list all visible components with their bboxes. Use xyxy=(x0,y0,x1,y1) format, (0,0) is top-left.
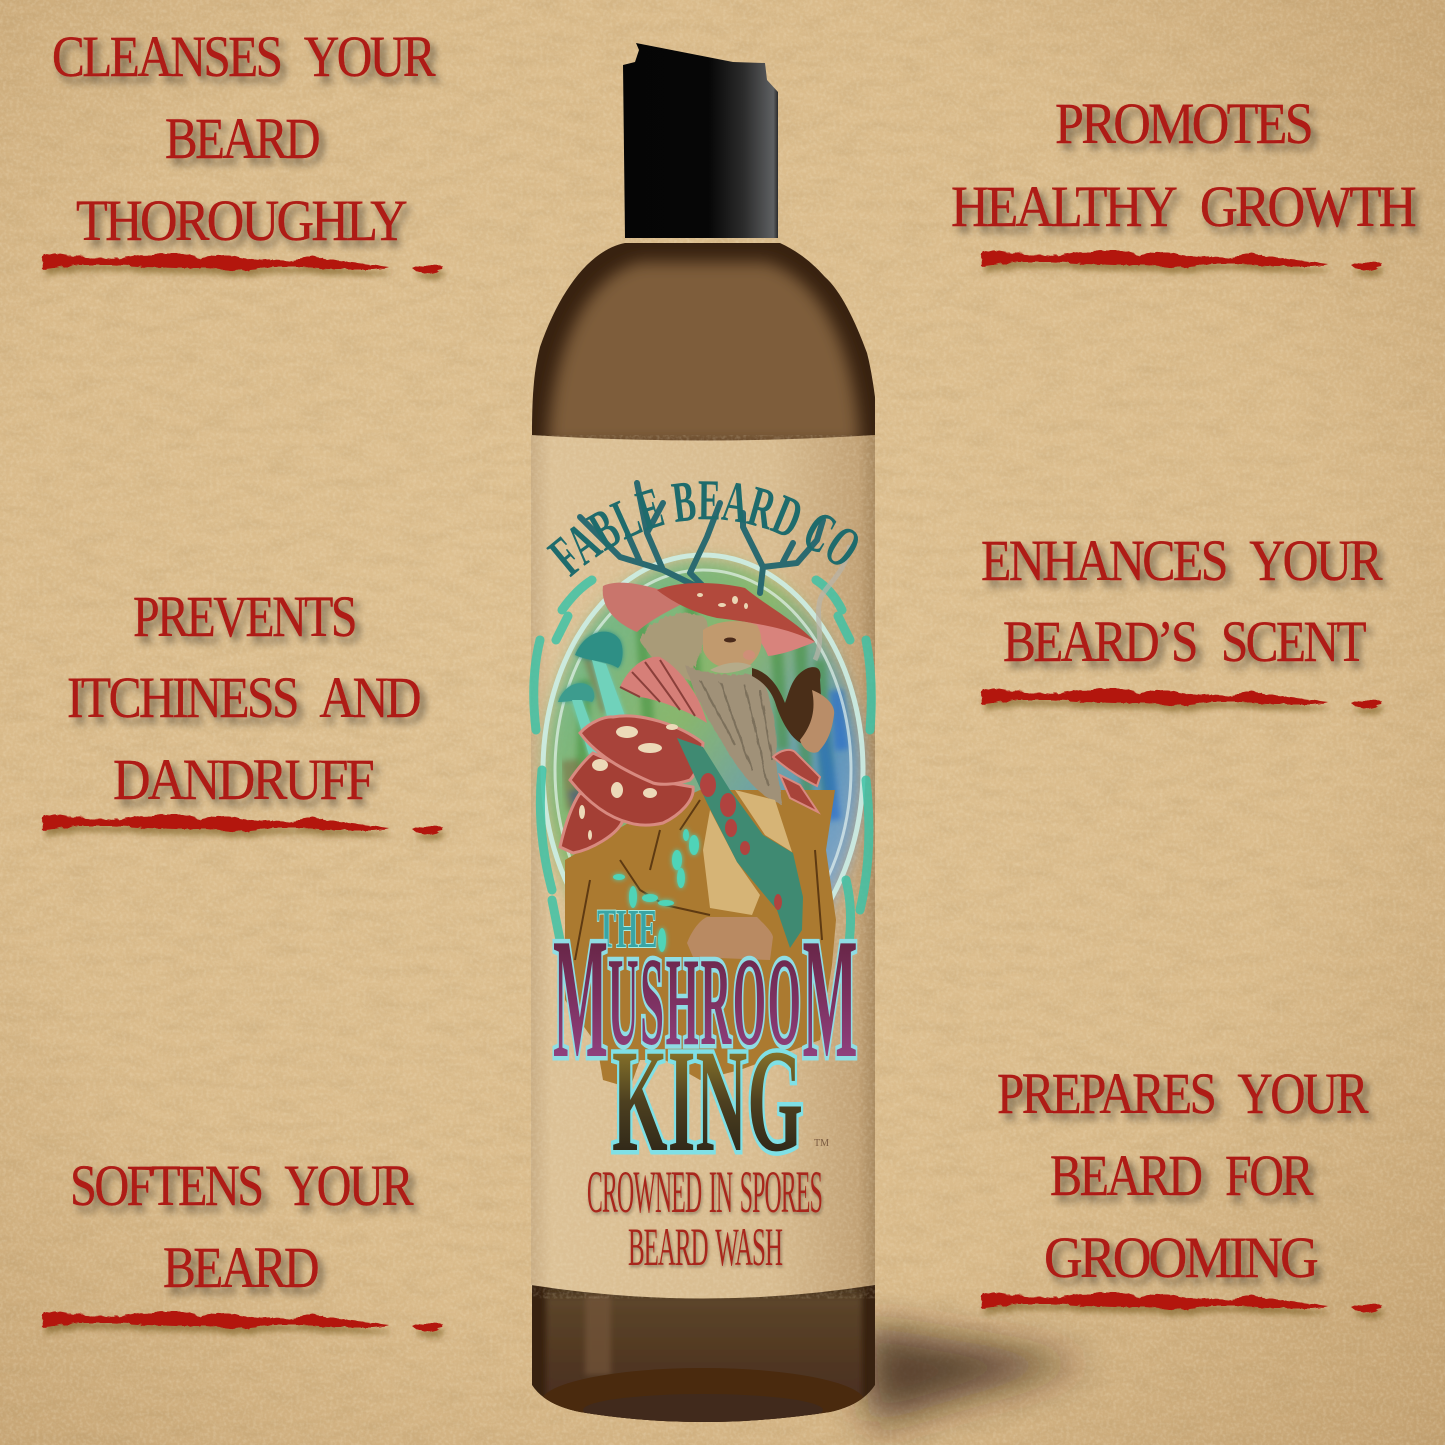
benefit: promotes healthy growth xyxy=(951,91,1416,271)
text line: ITCHINESS AND xyxy=(67,665,420,730)
benefit: softens your beard xyxy=(42,1153,443,1332)
text line: CLEANSES YOUR xyxy=(52,24,436,89)
mushroom: M xyxy=(553,903,608,1094)
torn underline xyxy=(981,250,1382,271)
hat underside left xyxy=(603,583,690,632)
shoulder mushroom caps xyxy=(560,657,707,853)
right shoulder caps xyxy=(773,750,820,812)
bottle cap xyxy=(623,43,778,238)
pipe and hand xyxy=(752,667,834,753)
text line: SOFTENS YOUR xyxy=(70,1153,414,1218)
mushroom: USHROO xyxy=(608,933,803,1072)
text line: BEARD xyxy=(165,106,319,171)
text line: PROMOTES xyxy=(1055,91,1311,156)
antlers xyxy=(580,483,823,593)
text line: THOROUGHLY xyxy=(76,188,407,253)
mushroom: M xyxy=(803,903,857,1094)
text line: BEARD xyxy=(163,1235,318,1300)
hat top xyxy=(657,583,815,642)
torn underline xyxy=(42,814,443,835)
inner robe xyxy=(703,790,792,915)
text line: ENHANCES YOUR xyxy=(981,528,1383,593)
bottle body xyxy=(525,235,885,1436)
bottle: CROWNED IN SPORES xyxy=(587,1159,822,1225)
hair xyxy=(640,613,707,680)
hat xyxy=(603,583,815,656)
label illustration: mushroom king xyxy=(534,483,871,1088)
text line: PREVENTS xyxy=(133,584,355,649)
bottle ground shadow xyxy=(860,1325,1090,1425)
robe folds xyxy=(575,800,822,960)
smoke xyxy=(815,545,850,660)
brand arc: fable beard co: FABLE BEARD CO xyxy=(546,481,858,578)
the: THE xyxy=(597,899,657,960)
hand xyxy=(687,917,773,960)
text line: DANDRUFF xyxy=(113,747,374,812)
face xyxy=(703,621,761,668)
torn underline xyxy=(42,253,443,274)
hat underside right xyxy=(745,621,815,656)
king: KING xyxy=(612,1020,803,1183)
text line: GROOMING xyxy=(1044,1225,1318,1290)
trademark: TM xyxy=(814,1138,829,1149)
product title: the mushroom king xyxy=(553,899,857,1183)
bottle label xyxy=(531,435,875,1298)
benefit: cleanses your beard thoroughly xyxy=(42,24,443,274)
bottle: BEARD WASH xyxy=(628,1217,782,1277)
torn underline xyxy=(981,1292,1382,1313)
torn underline xyxy=(981,688,1382,709)
scarf spots xyxy=(700,773,782,910)
benefit: prepares your beard for grooming xyxy=(981,1061,1382,1313)
bottle xyxy=(529,43,876,1422)
text line: BEARD FOR xyxy=(1050,1143,1314,1208)
text line: PREPARES YOUR xyxy=(997,1061,1369,1126)
robe xyxy=(565,790,836,1088)
benefit: prevents itchiness and dandruff xyxy=(42,584,443,835)
text line: BEARD’S SCENT xyxy=(1003,609,1366,674)
green scarf xyxy=(677,738,803,948)
glowing robe spots xyxy=(613,829,699,952)
beard xyxy=(685,663,782,805)
benefit: enhances your beard's scent xyxy=(981,528,1383,709)
teal mushrooms xyxy=(558,632,632,758)
forest arch xyxy=(534,555,871,990)
torn underline xyxy=(42,1311,443,1332)
